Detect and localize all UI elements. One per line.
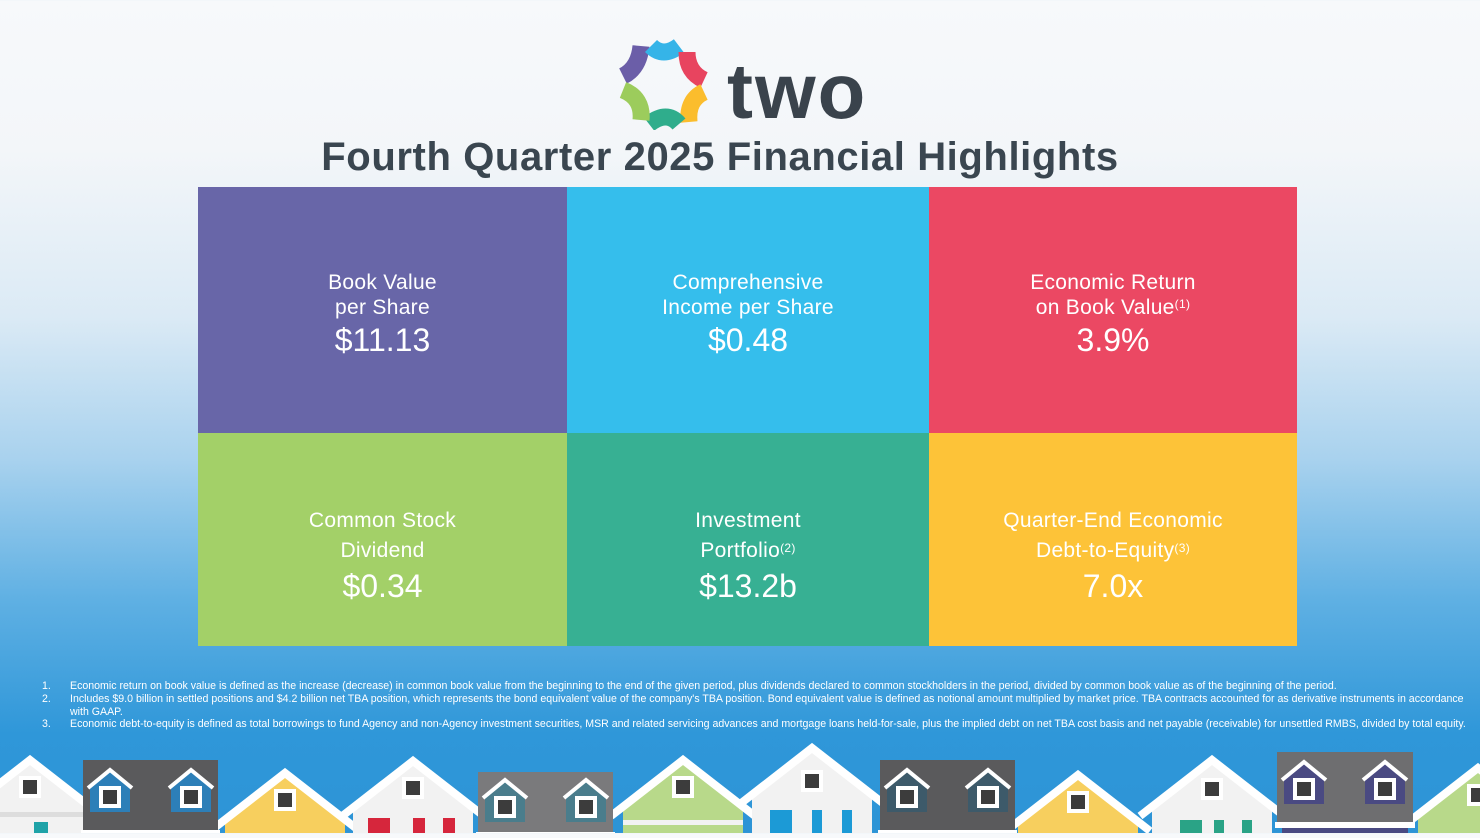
panel: investment portfolio: [567, 433, 929, 646]
gable houses: [0, 756, 102, 838]
footnotes: Includes $9.0 billion in settled positions and $4.2 billion net TBA position, which represents the bond equivalent value of the company's TBA position. Bond equivalent value is defined as notional amount multiplied by market price. TBA contracts accounted for as derivative instruments in accordance with GAAP.: [70, 693, 1464, 718]
panel: comprehensive income: Comprehensive: [672, 271, 823, 294]
panel: book value: [198, 187, 567, 433]
panel: dividend: $0.34: [342, 568, 423, 604]
panel: economic return: on Book Value(1): [1036, 296, 1190, 319]
panel: debt-to-equity: Quarter-End Economic: [1003, 508, 1223, 532]
panel: dividend: [198, 433, 567, 646]
panel: debt-to-equity: 7.0x: [1083, 568, 1143, 604]
footnotes: Economic debt-to-equity is defined as total borrowings to fund Agency and non-Agency investment securities, MSR and related servicing advances and mortgage loans held-for-sale, plus the implied debt on net TBA cost basis and net payable (receivable) for unsettled RMBS, divided by total equity.: [70, 718, 1466, 730]
icon: logo star: [623, 46, 704, 124]
logo: [619, 39, 867, 130]
footnotes: 3.: [42, 718, 51, 730]
title: Fourth Quarter 2025 Financial Highlights: [321, 135, 1119, 179]
footnotes: 2.: [42, 693, 51, 705]
panel: economic return: [929, 187, 1297, 433]
panel: debt-to-equity: Debt-to-Equity(3): [1036, 538, 1190, 562]
footnotes: [42, 680, 1466, 730]
panel: book value: Book Value: [328, 271, 437, 294]
panel: dividend: Dividend: [340, 538, 425, 562]
footnotes: Economic return on book value is defined as the increase (decrease) in common book value from the beginning to the end of the given period, plus dividends declared to common stockholders in the period, divided by common book value as of the beginning of the period.: [70, 680, 1337, 692]
panel: book value: per Share: [335, 296, 430, 319]
panel: dividend: Common Stock: [309, 508, 456, 532]
panel: economic return: Economic Return: [1030, 271, 1196, 294]
panel: comprehensive income: Income per Share: [662, 296, 834, 319]
panel: book value: $11.13: [335, 322, 430, 358]
footnotes: 1.: [42, 680, 51, 692]
panel: investment portfolio: Investment: [695, 508, 801, 532]
panel: debt-to-equity: [929, 433, 1297, 646]
houses row: [0, 743, 1480, 833]
panel: economic return: 3.9%: [1077, 322, 1149, 358]
panel: comprehensive income: $0.48: [708, 322, 788, 358]
gray-roof houses: [81, 760, 220, 838]
panel: investment portfolio: $13.2b: [699, 568, 797, 604]
panel: investment portfolio: Portfolio(2): [700, 538, 796, 562]
panel: comprehensive income: [567, 187, 929, 433]
